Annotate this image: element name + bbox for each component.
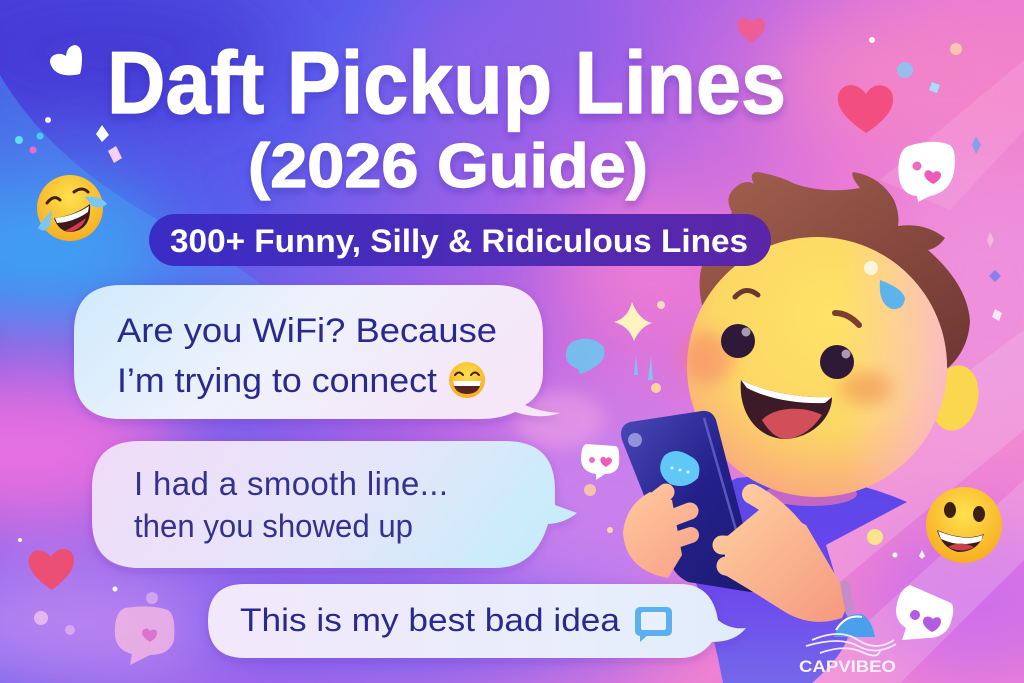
subtitle pill xyxy=(149,214,771,266)
logo: CAPVIBEO xyxy=(799,614,896,676)
hair xyxy=(700,172,970,368)
icon: red heart xyxy=(29,549,74,590)
cheek right xyxy=(840,372,892,404)
mouth xyxy=(741,380,832,439)
subtitle pill: 300+ Funny, Silly & Ridiculous Lines xyxy=(170,223,748,259)
icon: white heart xyxy=(50,45,82,75)
speech bubble 2 xyxy=(92,441,577,568)
neck collar xyxy=(765,482,857,506)
icon: pink heart large xyxy=(838,85,893,133)
left eye xyxy=(721,324,755,358)
icon: blue chat xyxy=(635,607,672,642)
speech bubble 3: This is my best bad idea xyxy=(240,602,620,638)
icon: pink heart small xyxy=(737,18,765,43)
speech bubble 2: then you showed up xyxy=(134,508,413,544)
right eye xyxy=(820,345,854,379)
title: Daft Pickup Lines xyxy=(107,33,786,132)
icon: chat bubble with heart bottom right xyxy=(896,585,953,640)
logo: CAPVIBEO: CAPVIBEO xyxy=(799,657,896,676)
speech bubble 2: I had a smooth line... xyxy=(134,465,448,502)
icon: grinning emoji xyxy=(449,362,485,398)
title xyxy=(107,33,786,201)
phone xyxy=(621,411,758,592)
left eyebrow xyxy=(735,290,758,297)
left hand xyxy=(623,492,691,578)
right eyebrow xyxy=(835,313,859,325)
ear xyxy=(926,361,984,435)
shirt xyxy=(680,476,907,683)
head xyxy=(687,237,947,497)
icon: chat bubble with heart top right xyxy=(898,142,955,202)
speech bubble 1: I’m trying to connect xyxy=(117,362,438,400)
icon: blue cloud bubble xyxy=(566,339,604,374)
head highlight xyxy=(687,237,947,497)
speech bubble 3 xyxy=(208,584,746,658)
icon: smiling emoji xyxy=(926,487,1002,563)
speech bubble 1 xyxy=(74,285,560,419)
icon: small white chat bubble xyxy=(581,444,619,480)
character xyxy=(621,172,984,683)
speech bubble 1: Are you WiFi? Because xyxy=(117,312,497,350)
right hand xyxy=(722,494,850,622)
icon: laughing crying emoji xyxy=(37,175,107,241)
title: (2026 Guide) xyxy=(248,132,648,201)
sweat drop xyxy=(864,261,905,309)
cheek left xyxy=(682,332,734,384)
icon: faded chat bubble bottom left xyxy=(115,606,174,665)
